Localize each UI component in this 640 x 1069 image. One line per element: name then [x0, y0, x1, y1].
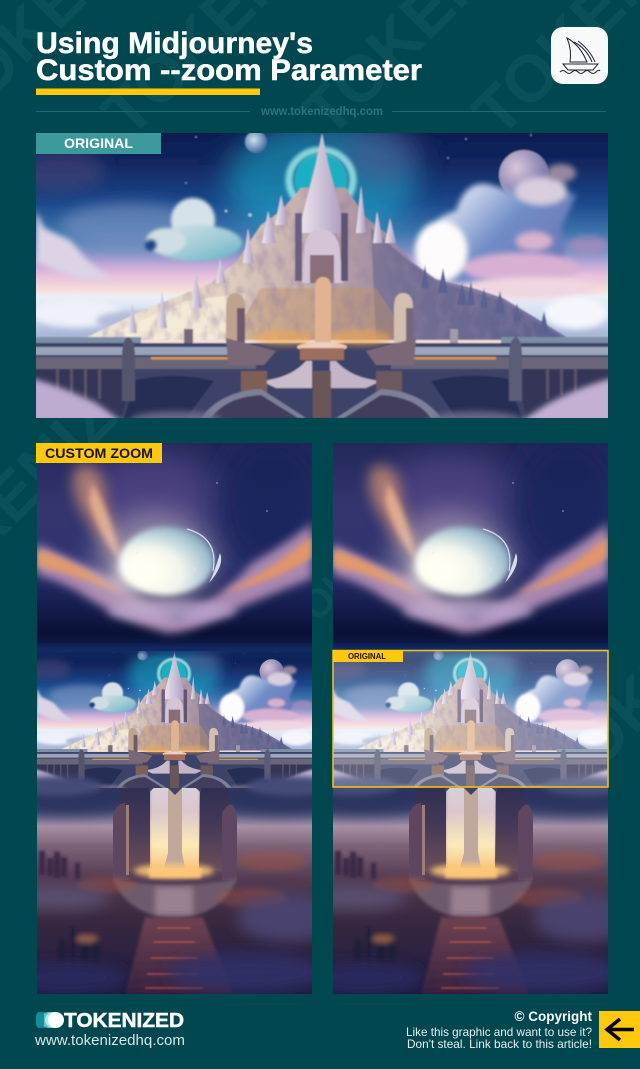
panel: original image	[16, 121, 613, 427]
zoomed out scene	[0, 433, 357, 994]
title underline	[36, 88, 260, 95]
title: Using Midjourney's	[36, 27, 313, 60]
title: Custom --zoom Parameter	[36, 54, 422, 87]
label: original inset: ORIGINAL	[348, 652, 386, 661]
footer: brand logo: TOKENIZED	[64, 1010, 184, 1032]
panel: custom zoom right	[288, 433, 640, 994]
footer: copyright note: Like this graphic and want to use it?	[406, 1025, 592, 1039]
footer: copyright note	[406, 1009, 592, 1051]
footer: copyright note: Don't steal. Link back to this article!	[407, 1037, 592, 1051]
zoomed out scene copy	[288, 433, 640, 994]
header divider with url: www.tokenizedhq.com	[260, 106, 383, 118]
watermark: TOKENIZED	[275, 452, 469, 646]
label: original inset	[333, 650, 403, 662]
label: original	[36, 133, 161, 154]
title	[36, 27, 422, 87]
footer: copyright note: © Copyright	[515, 1009, 592, 1024]
footer: website: www.tokenizedhq.com	[34, 1032, 185, 1049]
arrow button	[599, 1011, 640, 1048]
watermark	[0, 0, 640, 810]
inset: original frame	[333, 650, 608, 787]
label: custom zoom: CUSTOM ZOOM	[45, 445, 153, 461]
icon: Midjourney boat logo	[551, 27, 608, 84]
label: custom zoom	[36, 443, 162, 463]
panel: custom zoom left	[0, 433, 357, 994]
label: original: ORIGINAL	[64, 135, 133, 151]
city scene	[16, 121, 613, 427]
